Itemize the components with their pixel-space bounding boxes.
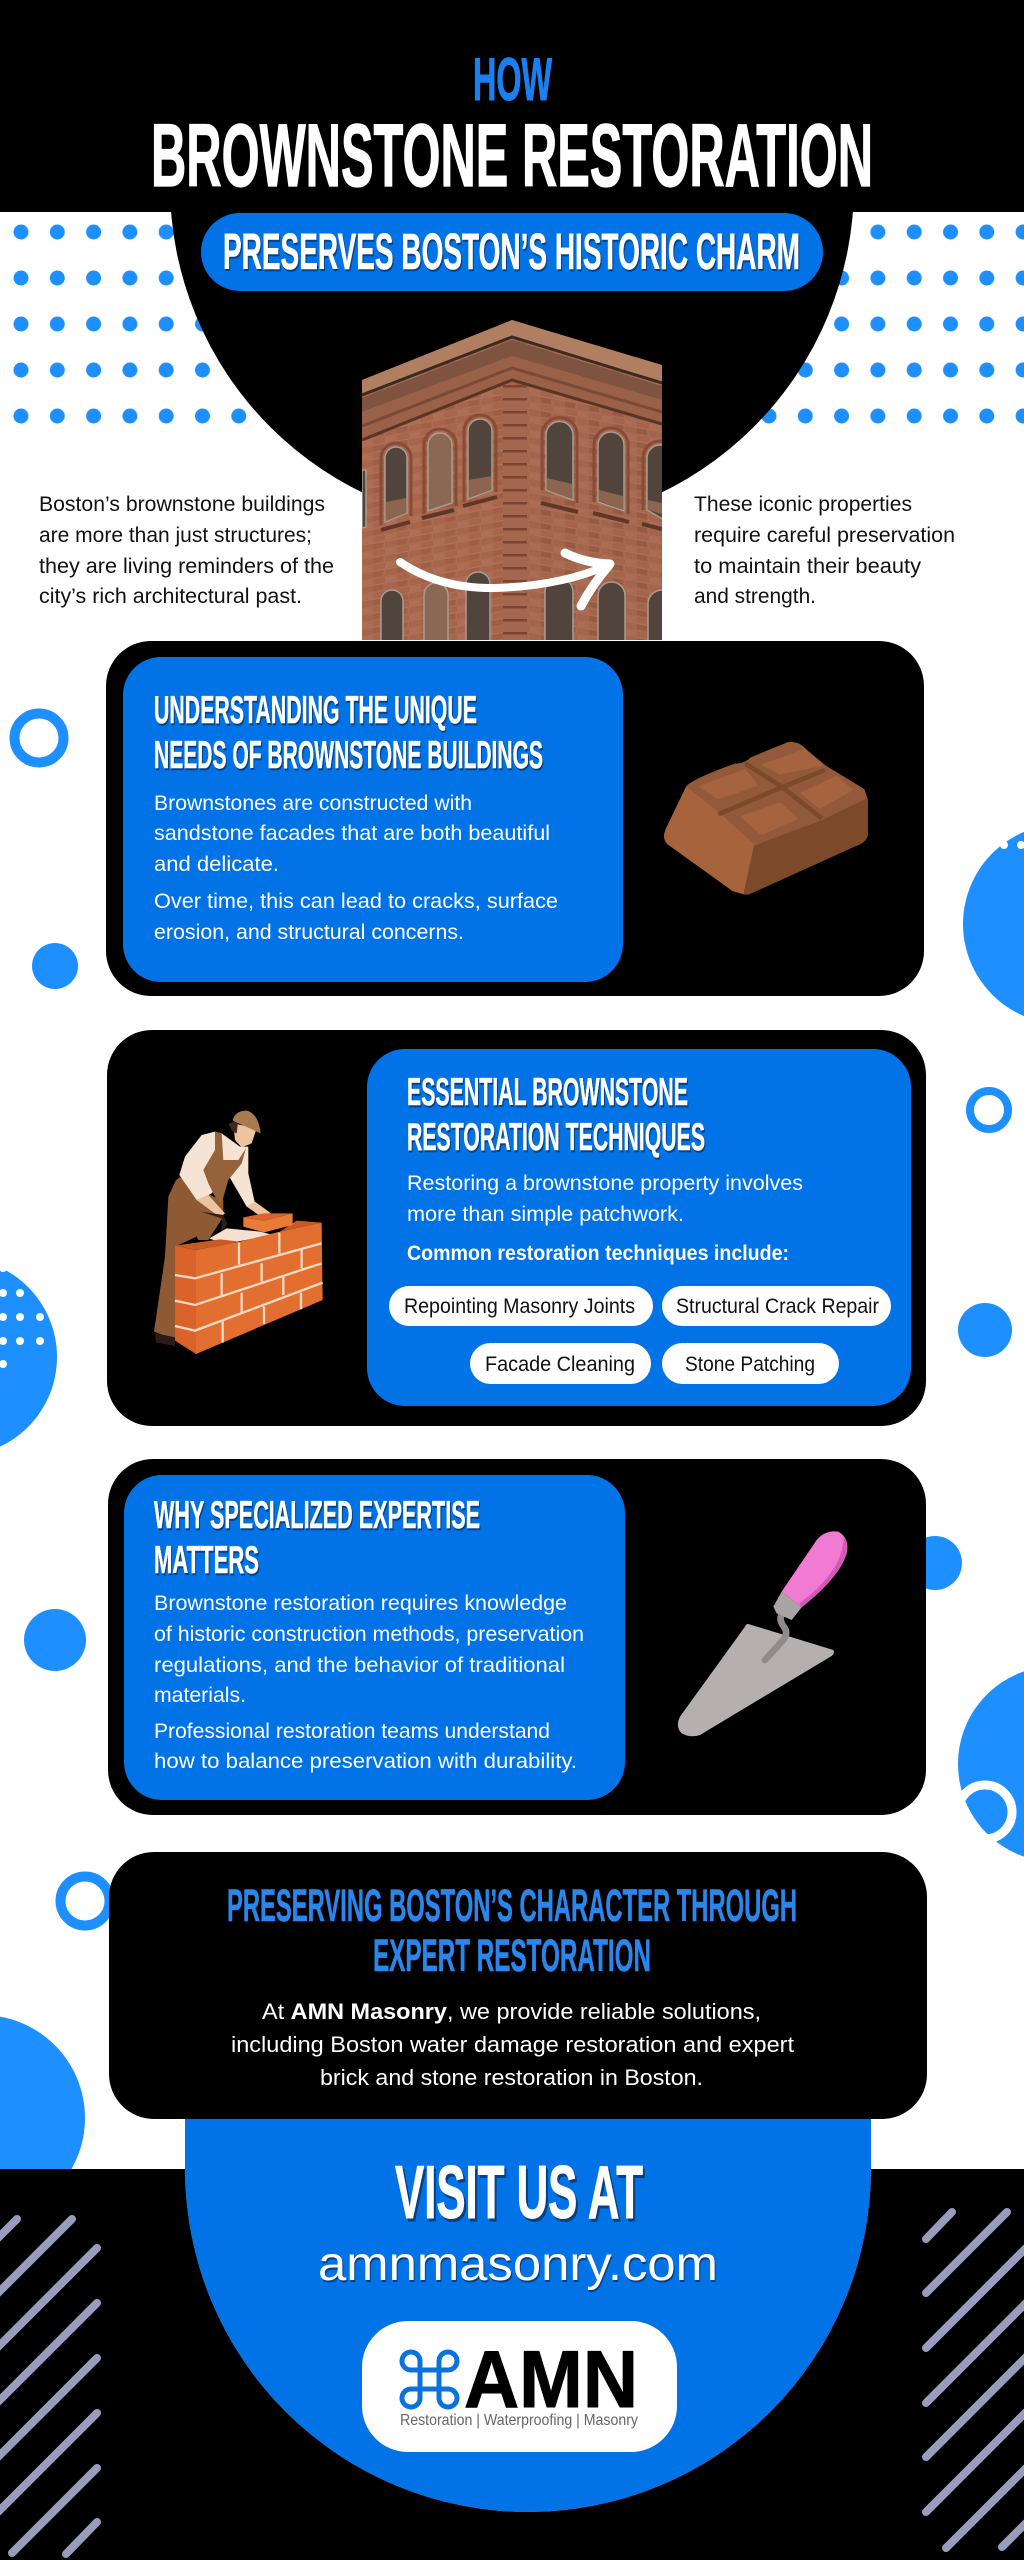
corner quoins	[503, 385, 527, 640]
footer band under semicircle	[185, 2169, 871, 2560]
body text: expertise: regulations, and the behavior of traditional	[154, 1654, 565, 1677]
footer band right	[871, 2169, 1024, 2560]
intro text left: they are living reminders of the	[39, 555, 334, 578]
footer band left	[0, 2169, 185, 2560]
intro text left: are more than just structures;	[39, 524, 312, 547]
body text: techniques: Restoring a brownstone property involves	[407, 1172, 803, 1195]
intro text right: These iconic properties	[694, 493, 912, 516]
panel: specialized expertise	[108, 1459, 926, 1815]
intro text right	[694, 493, 955, 608]
body text: understanding: Over time, this can lead to cracks, surface	[154, 890, 558, 913]
window lower panes	[386, 476, 662, 521]
panel: understanding brownstone	[106, 641, 924, 996]
heading: visit us at: VISIT US AT	[395, 2150, 643, 2234]
heading: understanding: UNDERSTANDING THE UNIQUE	[154, 689, 477, 732]
body text: expertise: Brownstone restoration requires knowledge	[154, 1592, 567, 1615]
heading: expertise	[154, 1494, 480, 1582]
intro text left	[39, 493, 334, 608]
heading: understanding	[154, 689, 543, 777]
icon: bricklayer	[154, 1111, 323, 1354]
heading: preserving character	[227, 1880, 797, 1981]
body text: expertise: Professional restoration teams understand	[154, 1720, 550, 1743]
decorative circles	[0, 714, 1024, 2221]
pill: crack repair	[662, 1286, 891, 1326]
arrow	[400, 553, 610, 606]
logo icon	[402, 2352, 457, 2407]
pill: facade cleaning	[470, 1343, 651, 1384]
roof band	[362, 320, 662, 395]
upper windows	[362, 419, 673, 528]
heading: preserving character: EXPERT RESTORATION	[373, 1930, 651, 1981]
heading: techniques	[407, 1071, 705, 1159]
logo tagline: Restoration | Waterproofing | Masonry	[400, 2412, 638, 2429]
body text: understanding: sandstone facades that are both beautiful	[154, 822, 550, 845]
window arches and sills	[381, 415, 677, 525]
body text: expertise: how to balance preservation with durability.	[154, 1750, 577, 1773]
intro text right: to maintain their beauty	[694, 555, 922, 578]
body text: understanding	[154, 792, 558, 944]
logo	[362, 2321, 677, 2452]
pill: repointing	[389, 1286, 653, 1326]
body text: preserving character: including Boston water damage restoration and expert	[231, 2032, 794, 2057]
body text: preserving character: brick and stone restoration in Boston.	[320, 2065, 703, 2090]
header band	[0, 0, 1024, 212]
building photo	[362, 320, 677, 645]
body text: expertise: of historic construction methods, preservation	[154, 1623, 584, 1646]
call to action	[318, 2150, 718, 2291]
body text: expertise: materials.	[154, 1684, 246, 1707]
lower windows	[381, 572, 676, 645]
panel: restoration techniques	[107, 1030, 926, 1426]
stripes left	[0, 2219, 97, 2554]
pill: stone patching: Stone Patching	[685, 1353, 815, 1376]
body text: techniques: more than simple patchwork.	[407, 1203, 684, 1226]
panel: preserving character	[109, 1852, 927, 2119]
black arc behind building	[170, 0, 854, 527]
heading: understanding: NEEDS OF BROWNSTONE BUILDINGS	[154, 734, 543, 777]
heading: techniques: ESSENTIAL BROWNSTONE	[407, 1071, 688, 1114]
intro text right: and strength.	[694, 585, 816, 608]
intro text left: city’s rich architectural past.	[39, 585, 302, 608]
body text: understanding: erosion, and structural concerns.	[154, 921, 464, 944]
dot pattern left	[3, 209, 257, 439]
pill: crack repair: Structural Crack Repair	[676, 1295, 879, 1318]
body text: preserving character	[231, 1999, 794, 2090]
body text: techniques	[407, 1172, 803, 1226]
title line: how: HOW	[473, 46, 552, 113]
website url: amnmasonry.com	[318, 2238, 718, 2291]
heading: techniques: RESTORATION TECHNIQUES	[407, 1116, 705, 1159]
intro text left: Boston’s brownstone buildings	[39, 493, 325, 516]
intro text right: require careful preservation	[694, 524, 955, 547]
subtitle pill	[201, 213, 823, 291]
CTA semicircle	[185, 2119, 871, 2512]
pill: facade cleaning: Facade Cleaning	[485, 1353, 635, 1376]
heading: expertise: MATTERS	[154, 1539, 259, 1582]
body text: expertise	[154, 1592, 584, 1773]
icon: brownstone block	[665, 743, 867, 893]
heading: expertise: WHY SPECIALIZED EXPERTISE	[154, 1494, 480, 1537]
title	[151, 46, 873, 205]
body text: understanding: and delicate.	[154, 853, 279, 876]
stripes right	[926, 2212, 1024, 2548]
subheading: common techniques: Common restoration techniques include:	[407, 1242, 789, 1265]
pill: stone patching	[662, 1343, 839, 1384]
body text: understanding: Brownstones are constructed with	[154, 792, 472, 815]
icon: trowel	[678, 1531, 847, 1736]
body text: preserving character: At AMN Masonry , we provide reliable solutions,	[262, 1999, 761, 2024]
dot pattern right	[751, 209, 1024, 439]
pill: repointing: Repointing Masonry Joints	[404, 1295, 635, 1318]
logo wordmark: AMN	[464, 2335, 638, 2425]
